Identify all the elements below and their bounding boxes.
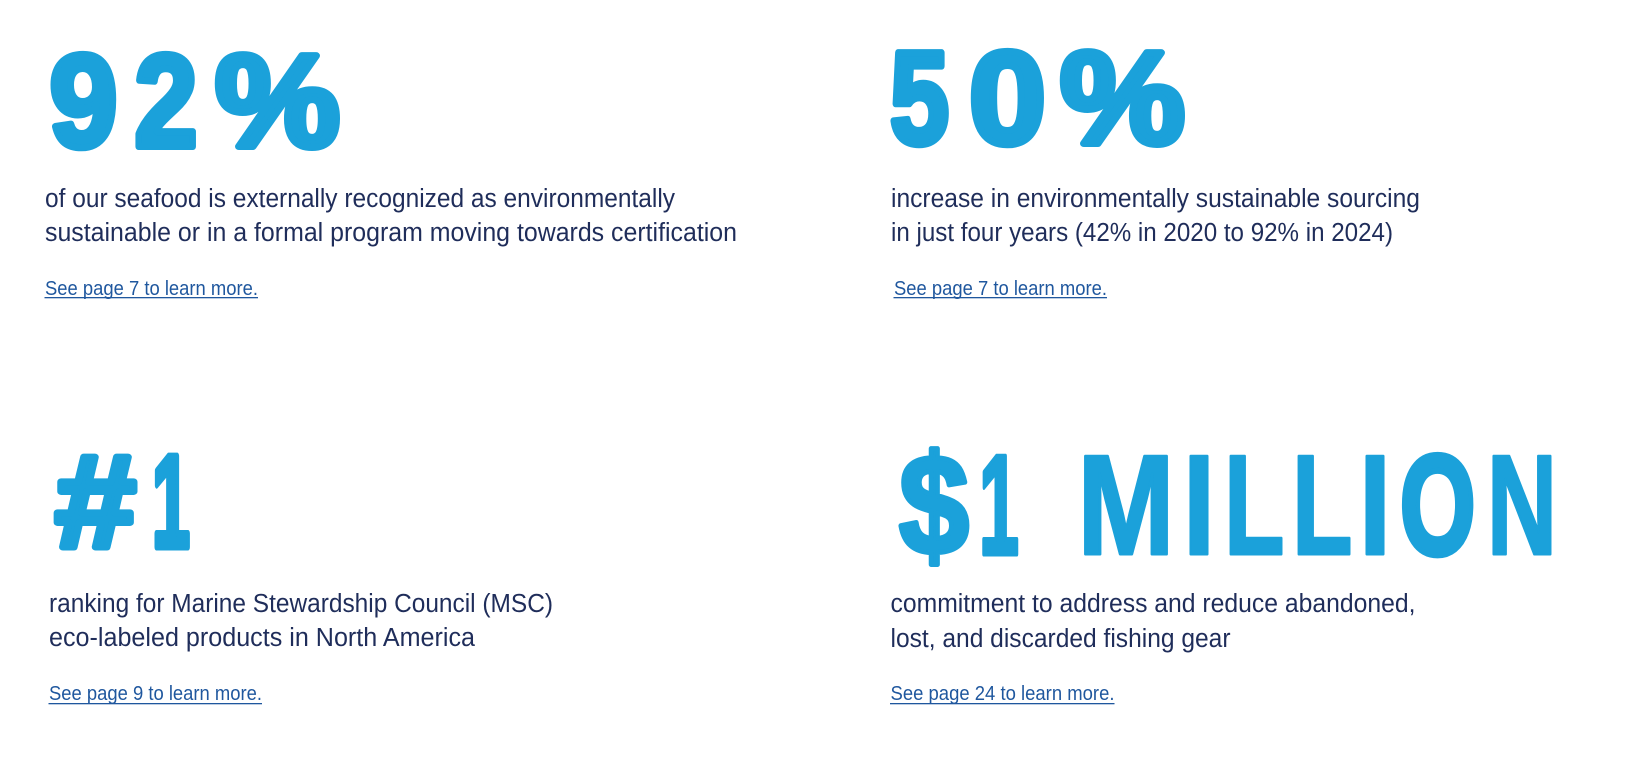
- panel: #1 stat: [48, 428, 553, 705]
- heading: $1 MILLION: L: [1224, 426, 1284, 585]
- heading: $1 MILLION: L: [1292, 426, 1352, 585]
- panel: 92% stat: [44, 28, 737, 300]
- heading: #1: 1: [152, 428, 190, 575]
- heading: 50%: 0: [969, 24, 1046, 172]
- link: see page 7: See page 7 to learn more.: [894, 277, 1107, 300]
- heading: 92%: 9: [50, 28, 118, 174]
- heading: $1 MILLION: I: [1359, 426, 1391, 585]
- text block: #1 description: eco-labeled products in North America: [49, 624, 476, 652]
- text block: 50% description: in just four years (42% in 2020 to 92% in 2024): [891, 219, 1393, 247]
- text block: 92% description: sustainable or in a formal program moving towards certification: [45, 219, 737, 247]
- link: see page 7: See page 7 to learn more.: [45, 277, 258, 300]
- text block: 50% description: increase in environmentally sustainable sourcing: [891, 185, 1420, 213]
- heading: $1 MILLION: I: [1183, 426, 1215, 585]
- panel: 50% stat: [890, 24, 1420, 300]
- heading: #1: #: [55, 428, 136, 575]
- heading: $1 MILLION: M: [1078, 426, 1174, 585]
- heading: 92%: 2: [134, 28, 198, 174]
- text block: 92% description: of our seafood is externally recognized as environmentally: [45, 185, 675, 213]
- heading: $1 MILLION: 1: [979, 426, 1019, 585]
- heading: $1 MILLION: N: [1487, 426, 1557, 585]
- heading: 50%: %: [1060, 24, 1185, 172]
- text block: $1 million description: commitment to address and reduce abandoned,: [890, 590, 1416, 618]
- heading: 92%: %: [215, 28, 340, 174]
- text block: #1 description: ranking for Marine Stewardship Council (MSC): [49, 590, 553, 618]
- heading: $1 MILLION: $: [899, 426, 969, 585]
- link: see page 9: See page 9 to learn more.: [49, 682, 262, 705]
- link: see page 24: See page 24 to learn more.: [890, 682, 1114, 705]
- heading: $1 MILLION: O: [1400, 426, 1475, 585]
- panel: $1 million stat: [890, 426, 1557, 705]
- heading: 50%: 5: [890, 24, 949, 172]
- text block: $1 million description: lost, and discarded fishing gear: [890, 625, 1231, 653]
